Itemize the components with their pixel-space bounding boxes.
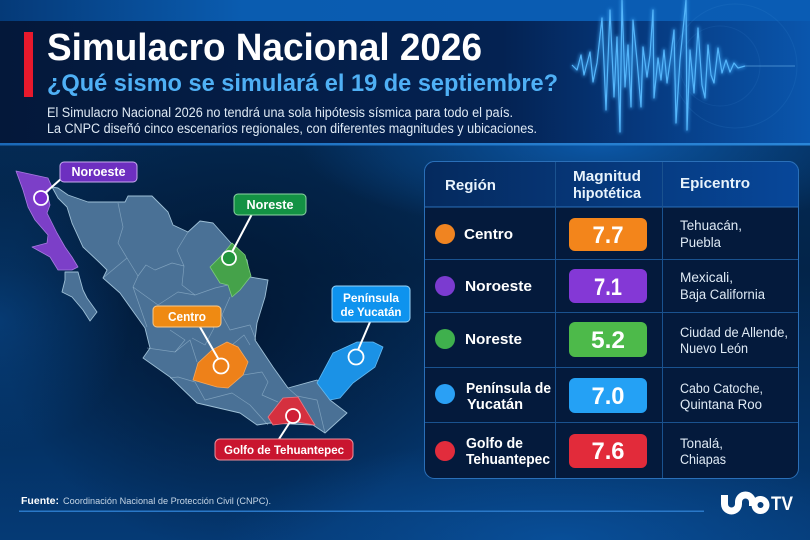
row: Península de Yucatán: Quintana Roo bbox=[680, 397, 762, 412]
row: Noreste: Nuevo León bbox=[680, 341, 748, 356]
row: Noroeste bbox=[435, 269, 765, 303]
subtitle: ¿Qué sismo se simulará el 19 de septiembre? bbox=[47, 70, 558, 97]
title: Simulacro Nacional 2026 bbox=[47, 27, 482, 69]
row: Golfo de Tehuantepec bbox=[435, 434, 726, 468]
row: Golfo de Tehuantepec: Chiapas bbox=[680, 452, 726, 467]
row: Noreste bbox=[435, 322, 788, 357]
map of Mexico bbox=[16, 171, 383, 433]
region: Noreste bbox=[210, 243, 251, 297]
callout: Península de Yucatán bbox=[332, 286, 410, 364]
row: Noreste: Ciudad de Allende, bbox=[680, 325, 788, 340]
region: Noroeste (Baja California) bbox=[16, 171, 78, 270]
callout: Noreste: Noreste bbox=[246, 198, 294, 212]
header band bbox=[0, 0, 810, 146]
row: Golfo de Tehuantepec: 7.6 bbox=[592, 438, 624, 465]
row: Golfo de Tehuantepec: Tonalá, bbox=[680, 436, 723, 451]
row: Noroeste: 7.1 bbox=[594, 274, 622, 301]
row: Península de Yucatán: Península de bbox=[466, 381, 551, 397]
red accent bar bbox=[24, 32, 33, 97]
row: Centro: Centro bbox=[464, 227, 513, 243]
icon: seismograph wave bbox=[572, 0, 797, 132]
row: Centro: 7.7 bbox=[592, 222, 624, 249]
region: Centro bbox=[193, 342, 248, 388]
row: Noroeste: Baja California bbox=[680, 287, 765, 302]
row: Península de Yucatán: Cabo Catoche, bbox=[680, 381, 763, 396]
panel: data table bbox=[424, 162, 798, 478]
row: Centro: Puebla bbox=[680, 235, 721, 250]
callout: Golfo de Tehuantepec bbox=[215, 409, 353, 460]
source footer: Coordinación Nacional de Protección Civil (CNPC). bbox=[63, 496, 271, 507]
row: Península de Yucatán: Yucatán bbox=[467, 397, 523, 413]
region: Golfo de Tehuantepec bbox=[268, 397, 315, 425]
callout: Península de Yucatán: Península bbox=[343, 291, 399, 305]
table header: Epicentro bbox=[680, 176, 750, 192]
source footer: Fuente: bbox=[21, 495, 59, 507]
callout: Península de Yucatán: de Yucatán bbox=[340, 305, 402, 319]
callout: Noroeste: Noroeste bbox=[72, 165, 126, 179]
callout: Noroeste bbox=[34, 162, 137, 205]
row: Noreste: 5.2 bbox=[591, 327, 625, 354]
callout: Centro: Centro bbox=[168, 310, 206, 324]
row: Centro: Tehuacán, bbox=[680, 218, 742, 233]
callout: Golfo de Tehuantepec: Golfo de Tehuantepec bbox=[224, 443, 344, 457]
row: Península de Yucatán bbox=[435, 378, 763, 413]
row: Golfo de Tehuantepec: Golfo de bbox=[466, 436, 523, 452]
intro text: El Simulacro Nacional 2026 no tendrá una sola hipótesis sísmica para todo el país. bbox=[47, 105, 513, 120]
title block bbox=[24, 27, 558, 97]
callout: Noreste bbox=[222, 194, 306, 265]
intro text: La CNPC diseñó cinco escenarios regionales, con diferentes magnitudes y ubicaciones. bbox=[47, 121, 537, 136]
logo: UNO TV: TV bbox=[771, 494, 793, 515]
row: Península de Yucatán: 7.0 bbox=[592, 383, 624, 410]
intro text bbox=[47, 105, 537, 136]
logo: UNO TV bbox=[724, 494, 793, 515]
row: Noroeste: Mexicali, bbox=[680, 270, 733, 285]
row: Noroeste: Noroeste bbox=[465, 279, 532, 295]
table header bbox=[445, 169, 750, 202]
base territory bbox=[52, 187, 347, 433]
table header: Magnitud bbox=[573, 169, 641, 185]
callout: Centro bbox=[153, 306, 228, 374]
row: Noreste: Noreste bbox=[465, 332, 522, 348]
table header: Región bbox=[445, 178, 496, 194]
source footer bbox=[19, 495, 704, 512]
row: Golfo de Tehuantepec: Tehuantepec bbox=[466, 452, 550, 468]
row: Centro bbox=[435, 218, 742, 251]
table header: hipotética bbox=[573, 186, 642, 202]
region: Yucatán bbox=[317, 342, 383, 400]
